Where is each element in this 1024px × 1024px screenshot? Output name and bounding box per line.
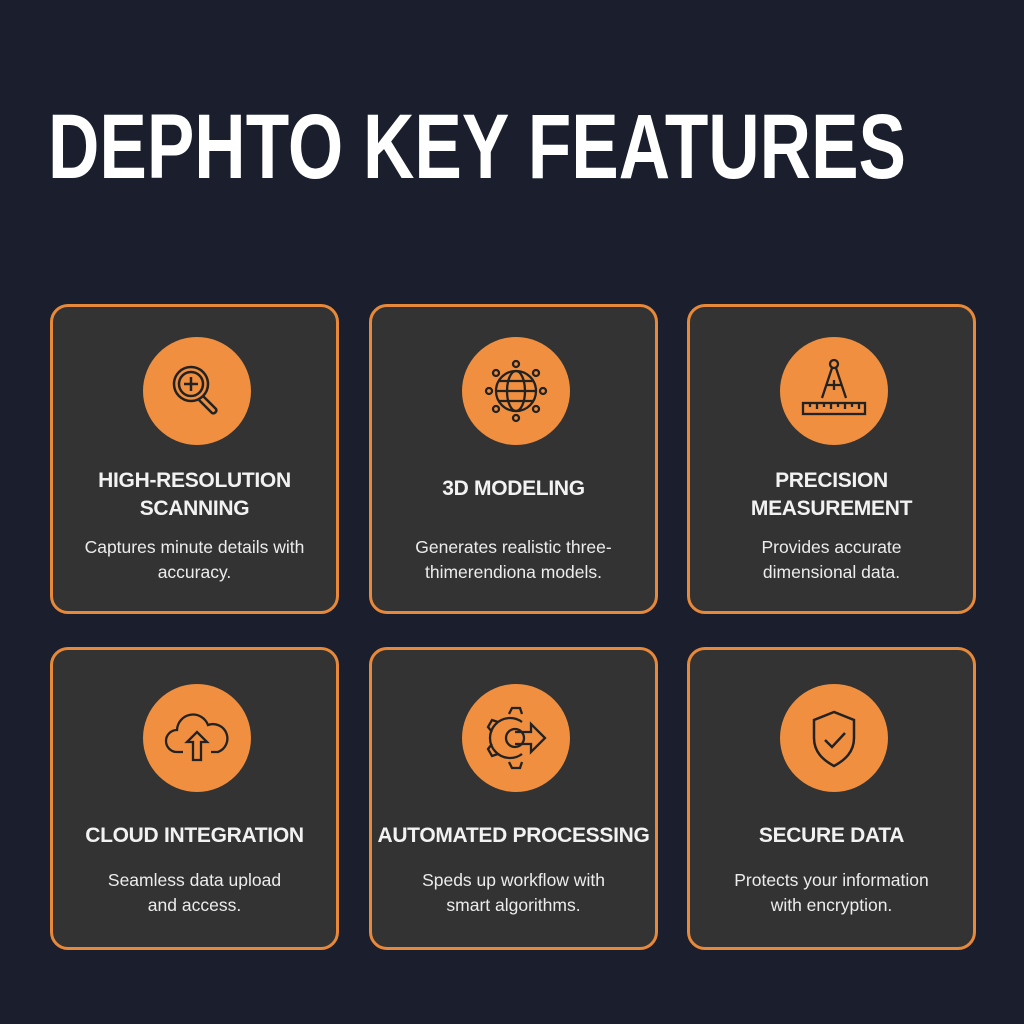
- icon: gear arrow: [462, 684, 570, 792]
- description: Provides accurate: [761, 537, 902, 557]
- icon: magnifier: [143, 337, 251, 445]
- icon: compass ruler: [780, 337, 888, 445]
- icon: globe: [462, 337, 570, 445]
- description: with encryption.: [771, 895, 892, 915]
- panel: cloud integration: [50, 647, 339, 950]
- heading: 3D MODELING: [442, 477, 585, 500]
- description: dimensional data.: [763, 562, 900, 582]
- heading: PRECISION: [775, 469, 888, 492]
- heading: CLOUD INTEGRATION: [85, 824, 304, 847]
- icon: cloud upload: [143, 684, 251, 792]
- description: smart algorithms.: [446, 895, 581, 915]
- panel: high-resolution scanning: [50, 304, 339, 614]
- description: Protects your information: [734, 870, 929, 890]
- description: [415, 537, 612, 582]
- description: [108, 870, 281, 915]
- description: Captures minute details with: [85, 537, 304, 557]
- heading: SECURE DATA: [759, 824, 904, 847]
- panel: automated processing: [369, 647, 658, 950]
- description: thimerendiona models.: [425, 562, 602, 582]
- panel: precision measurement: [687, 304, 976, 614]
- description: Generates realistic three-: [415, 537, 612, 557]
- panel: 3d modeling: [369, 304, 658, 614]
- description: [85, 537, 304, 582]
- description: accuracy.: [158, 562, 231, 582]
- heading: [98, 469, 291, 520]
- panel: secure data: [687, 647, 976, 950]
- heading: HIGH-RESOLUTION: [98, 469, 291, 492]
- description: [761, 537, 902, 582]
- icon: shield: [780, 684, 888, 792]
- heading: SCANNING: [140, 497, 249, 520]
- description: [422, 870, 605, 915]
- heading: [751, 469, 912, 520]
- description: [734, 870, 929, 915]
- heading: AUTOMATED PROCESSING: [377, 824, 650, 847]
- description: Seamless data upload: [108, 870, 281, 890]
- heading: MEASUREMENT: [751, 497, 912, 520]
- description: Speds up workflow with: [422, 870, 605, 890]
- description: and access.: [148, 895, 241, 915]
